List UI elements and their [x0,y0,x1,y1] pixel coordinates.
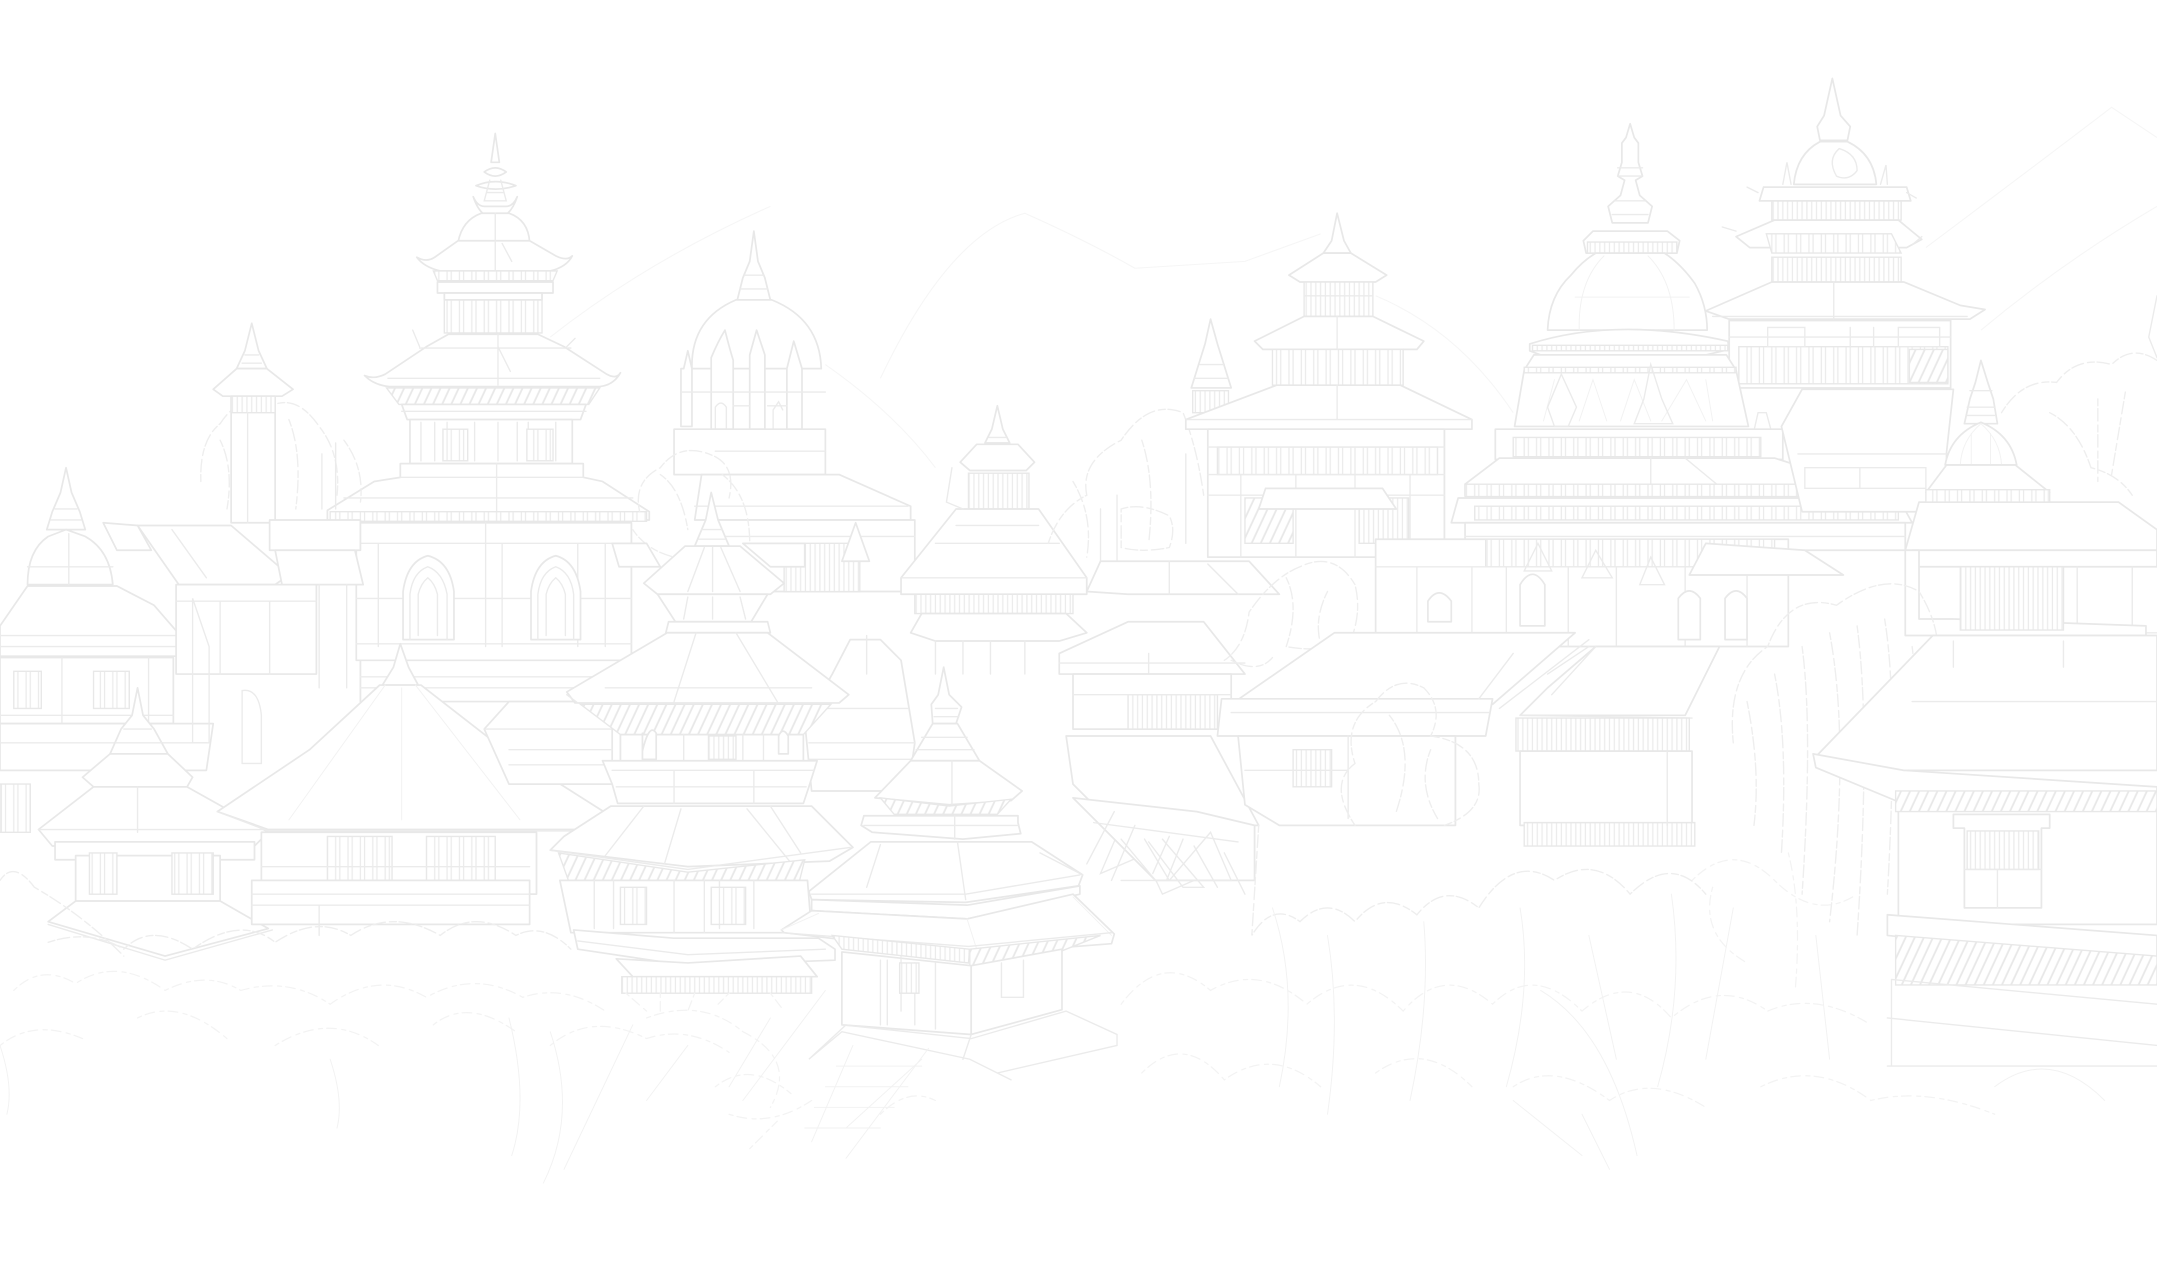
lower brackets [559,853,805,887]
band [861,816,1021,839]
spire [1817,78,1850,140]
small far left tower [213,323,293,523]
frieze [433,271,557,281]
roof tier [1926,465,2050,492]
second bands [1451,498,1912,523]
front pagoda, two-tier octagonal [550,492,853,1015]
spire [1323,213,1351,253]
spire [47,468,85,530]
dome [692,300,821,369]
right low building [1516,647,1720,846]
roof [1816,636,2157,770]
upper colonnade [1772,199,1901,220]
upper brackets [581,704,831,735]
upper roof [417,241,572,271]
middle frieze [1736,220,1922,248]
lower colonnade [1772,257,1901,285]
window [1953,814,2050,908]
left stupa building [0,468,213,832]
central small pagoda [842,406,1087,674]
dome [458,213,530,242]
ribbed dome [1945,422,2017,465]
wall [674,429,825,475]
lower plinth [574,930,835,966]
middle bands [603,761,817,803]
tiered hall [1186,213,1472,557]
body [1208,429,1444,557]
body [842,952,971,1034]
right hand gables [1087,812,1231,880]
third roof [1186,385,1472,429]
body [0,658,173,724]
upper roof [567,633,849,703]
white roof behind right side [1781,389,1953,512]
domed palace [674,231,915,592]
foreground foliage centre [564,990,935,1169]
main storey [410,420,572,464]
distant finial at far right edge [2149,296,2157,358]
body [76,856,220,908]
lower roof [550,806,853,867]
second roof [809,842,1083,902]
fringe [832,935,970,963]
spire [1964,360,1997,424]
lower storey [560,880,812,933]
spire [491,133,499,162]
dome [28,530,113,585]
octagonal roof pavilion [217,644,608,935]
minarets [681,351,692,426]
arches [403,556,454,640]
dome [1794,142,1876,184]
tree in front of flat roof [1341,683,1479,825]
distant mountains [550,107,2157,468]
dome [1548,253,1707,330]
tier [960,444,1034,470]
long hall right of centre [1376,539,1843,647]
house with gabled roof at right [1905,550,2146,636]
roof [217,685,608,830]
roof [695,475,911,520]
broad roof [1706,282,1985,319]
roof [39,787,268,846]
bands behind front pagoda [484,543,805,784]
walls [261,832,537,894]
roof [0,586,190,656]
spire [737,231,770,300]
mid pagoda behind front tower [805,636,915,791]
tall pagoda [327,133,649,702]
ground storey [356,523,631,660]
far right tree [2002,353,2157,495]
small top roof [644,546,784,594]
cluster of left houses [103,520,363,763]
top collar [666,622,770,633]
foreground foliage left [0,872,729,1183]
small drum [658,594,768,622]
lower roof [781,894,1114,955]
body [1729,321,1951,388]
far right large house [1813,636,2157,1066]
top roof [83,754,193,787]
middle roof [365,334,620,387]
spire [985,406,1010,443]
tree group centre [1048,409,1204,564]
tree beside small tower [201,402,361,509]
lower body with triangles [1515,355,1748,426]
finial [695,492,729,546]
foreground foliage right [1121,825,2105,1169]
upper storey [620,735,803,762]
tree at centre right [1224,561,1358,667]
far left low pagoda [39,688,272,960]
big roof [327,464,649,520]
base [360,660,626,702]
weeping trees [1692,584,1938,990]
finial and rings [1608,124,1652,223]
steps plinth [809,1011,1117,1080]
lower cap [616,956,817,977]
wide flat roof [1217,633,1589,825]
broad roof [1465,458,1857,495]
small spire by the tiered hall [1191,319,1231,413]
small right stupa [1905,360,2157,633]
temple: upper right tiered tower [1706,78,1985,388]
shaft [231,396,275,523]
temple: great white dome [1451,124,1912,550]
tier [911,724,979,761]
eave [213,369,293,396]
small finials [1548,365,1775,443]
finial [382,644,418,685]
lower roof [48,901,268,956]
spire [237,323,267,369]
brackets [387,388,600,404]
second band [812,886,1080,919]
wall [1898,801,2157,924]
roof [138,525,289,585]
tree at palace [633,451,750,557]
small eave [473,197,517,215]
spire [110,688,168,754]
plinth [252,880,530,924]
centre low roofs [1059,561,1279,894]
stairs [805,1045,929,1158]
second roof [1255,316,1424,349]
top roof [1289,253,1387,282]
lower bands [1887,915,2157,963]
upper colonnade [444,293,542,333]
house [176,585,316,674]
drum [1530,329,1729,355]
right side of front pagoda, small pavilions [1073,798,1255,894]
front tower [781,667,1117,1158]
base [1495,429,1783,459]
upper roof [875,761,1022,805]
spire [931,667,962,724]
